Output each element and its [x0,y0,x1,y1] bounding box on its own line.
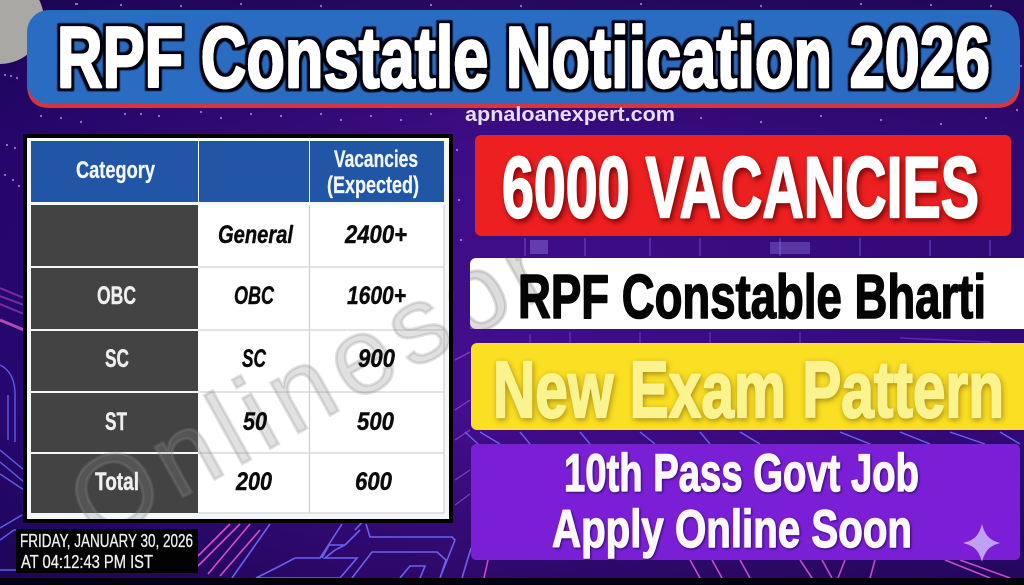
date stamp: FRIDAY, JANUARY 30, 2026 [20,531,193,551]
table values: 600 [355,468,392,496]
table values: SC [242,345,267,373]
table values [218,221,407,496]
table category labels: ST [105,408,127,436]
watermark over white panel: Onlinesor [48,200,574,565]
table values: 500 [357,408,394,436]
purple panel: 10th pass govt job [471,444,1020,560]
table category labels: OBC [97,282,136,310]
decorative grey circle at top-left [0,0,44,64]
table values: OBC [234,282,275,310]
table category labels: SC [105,345,129,373]
table category labels [95,282,139,496]
table header cells [31,141,444,202]
vacancy table [23,134,453,523]
watermark over table: Onlinesor [48,200,574,565]
table category labels: Total [95,468,139,496]
website label: apnaloanexpert.com [465,104,675,126]
date stamp [16,529,198,573]
table values: 1600+ [347,282,406,310]
table values: 200 [235,468,272,496]
table values: General [218,221,294,249]
table header labels: Vacancies [334,146,418,173]
table header labels [76,146,419,199]
title banner [27,10,1020,108]
table values: 2400+ [344,221,407,249]
table header labels: (Expected) [327,172,419,199]
date stamp: AT 04:12:43 PM IST [21,552,153,572]
purple panel: 10th pass govt job: Apply Online Soon [552,500,912,559]
table category column [31,205,198,513]
table values: 50 [243,408,267,436]
table values: 900 [358,345,395,373]
table header labels: Category [76,157,155,184]
table value cells [198,205,444,513]
icon: sparkle [963,524,1000,562]
